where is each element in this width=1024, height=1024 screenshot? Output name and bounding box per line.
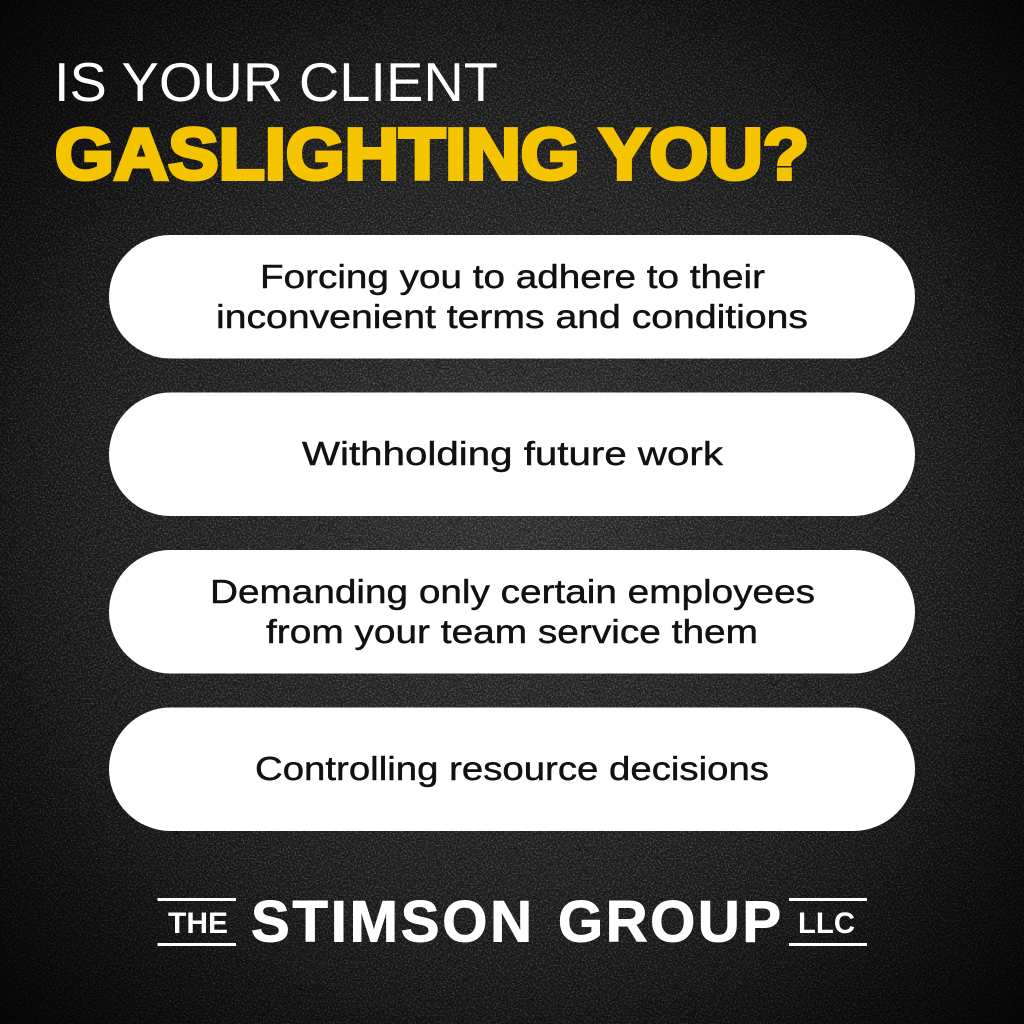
title [54,51,809,195]
title line 2: GASLIGHTING YOU? [55,115,809,195]
logo: LLC block [789,898,867,946]
item 1 text: inconvenient terms and conditions [216,298,808,335]
panel: item 2 [109,392,915,516]
panel: item 4 [109,708,915,831]
item 3 text: from your team service them [266,613,758,650]
logo: THE block: THE [168,907,228,940]
logo: The Stimson Group LLC [158,890,867,954]
item 2 text: Withholding future work [302,435,724,472]
logo: company name: STIMSON [251,890,532,954]
item 1 text: Forcing you to adhere to their [260,258,765,295]
title line 1: IS YOUR CLIENT [54,51,498,113]
panel: item 3 [109,550,915,674]
panel: item 1 [109,235,915,358]
logo: company name: GROUP [558,890,781,954]
logo: THE block [158,898,236,946]
logo: LLC block: LLC [798,907,855,940]
item 4 text: Controlling resource decisions [255,750,769,787]
item 3 text: Demanding only certain employees [210,573,815,610]
